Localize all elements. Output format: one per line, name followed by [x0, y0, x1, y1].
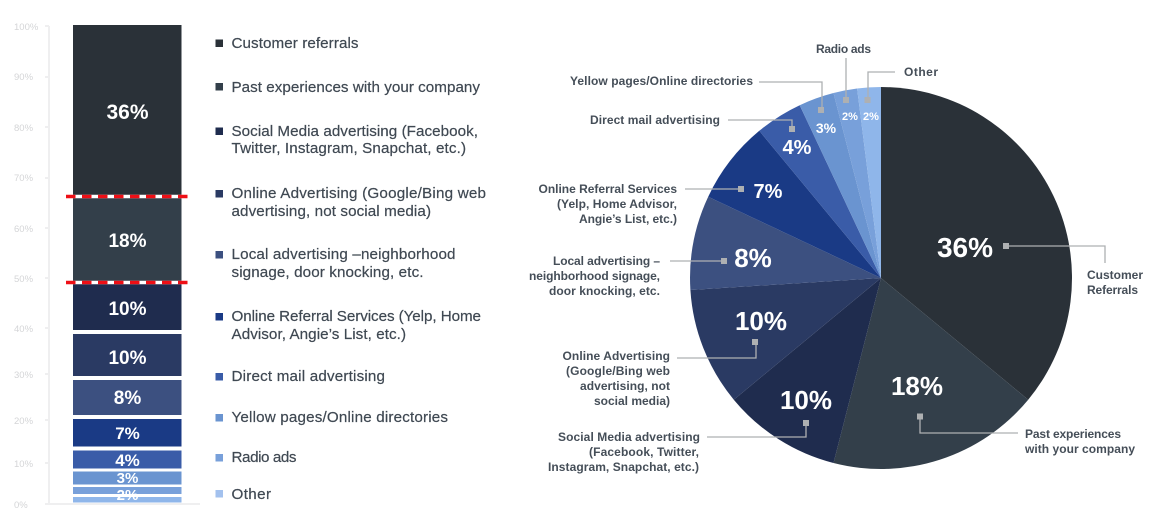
- stacked bar chart: 8%: [114, 388, 141, 409]
- callout: online advertising: advertising, not: [580, 379, 670, 393]
- stacked bar chart: 18%: [108, 231, 147, 252]
- axis: percentage scale: 90%: [14, 72, 34, 83]
- stacked bar chart: 10%: [108, 348, 147, 369]
- pie chart: 18%: [891, 371, 943, 401]
- stacked bar chart: 36%: [106, 101, 149, 124]
- axis: percentage scale: 10%: [14, 459, 34, 470]
- axis: percentage scale: 50%: [14, 274, 34, 285]
- callout: online referral services: (Yelp, Home Advisor,: [557, 197, 677, 211]
- axis: percentage scale: 30%: [14, 370, 34, 381]
- callout: local advertising: door knocking, etc.: [549, 284, 660, 298]
- callout: yellow pages: Yellow pages/Online directories: [570, 74, 753, 88]
- callout: direct mail advertising: Direct mail advertising: [590, 113, 720, 127]
- legend: Local advertising –neighborhood: [232, 246, 456, 263]
- callout: social media advertising: Instagram, Snapchat, etc.): [548, 460, 699, 474]
- legend: [216, 35, 486, 503]
- callout: radio ads: [816, 42, 871, 103]
- legend: Online Advertising (Google/Bing web: [232, 185, 486, 202]
- pie chart: 2%: [842, 111, 858, 123]
- callout: customer referrals: Referrals: [1087, 283, 1138, 297]
- legend: Customer referrals: [232, 35, 359, 52]
- legend: Direct mail advertising: [232, 368, 385, 385]
- legend: Yellow pages/Online directories: [232, 409, 448, 426]
- callout: online referral services: Angie’s List, etc.): [579, 212, 677, 226]
- stacked bar chart: 10%: [108, 299, 147, 320]
- callout: local advertising: neighborhood signage,: [529, 269, 660, 283]
- pie chart: 2%: [863, 111, 879, 123]
- callout: past experiences: with your company: [1024, 442, 1135, 456]
- callout: online advertising: social media): [594, 394, 670, 408]
- axis: percentage scale: [14, 22, 200, 511]
- legend: Online Referral Services (Yelp, Home: [232, 308, 481, 325]
- pie chart: 36%: [937, 232, 993, 263]
- axis: percentage scale: 60%: [14, 224, 34, 235]
- stacked bar chart: 2%: [117, 487, 138, 504]
- stacked bar chart: 7%: [115, 424, 140, 443]
- callout: customer referrals: [1003, 243, 1143, 297]
- legend: advertising, not social media): [232, 203, 431, 220]
- callout: past experiences: [917, 414, 1135, 456]
- stacked bar chart: [73, 25, 182, 504]
- red dashed marker lines: [66, 196, 189, 282]
- callout: social media advertising: Social Media advertising: [558, 430, 700, 444]
- axis: percentage scale: 20%: [14, 416, 34, 427]
- stacked bar chart: 4%: [115, 451, 140, 470]
- axis: percentage scale: 80%: [14, 123, 34, 134]
- callout: other: [864, 65, 938, 103]
- pie chart: 7%: [754, 181, 783, 203]
- callout: other: Other: [904, 65, 938, 79]
- axis: percentage scale: 40%: [14, 324, 34, 335]
- callout: direct mail advertising: [590, 113, 795, 132]
- legend: Social Media advertising (Facebook,: [232, 123, 478, 140]
- callout: yellow pages: [570, 74, 824, 113]
- legend: Radio ads: [232, 449, 297, 466]
- pie chart: 10%: [735, 306, 787, 336]
- pie chart: [690, 87, 1072, 469]
- callout: online advertising: Online Advertising: [562, 349, 670, 363]
- callout: online advertising: (Google/Bing web: [566, 364, 670, 378]
- callout: online referral services: Online Referral Services: [538, 182, 677, 196]
- pie chart: 8%: [734, 243, 772, 273]
- callout: online referral services: [538, 182, 744, 226]
- callout: past experiences: Past experiences: [1025, 427, 1121, 441]
- pie chart: 4%: [783, 137, 812, 159]
- callout: customer referrals: Customer: [1087, 268, 1143, 282]
- axis: percentage scale: 70%: [14, 173, 34, 184]
- legend: Advisor, Angie’s List, etc.): [232, 326, 406, 343]
- legend: Other: [232, 486, 271, 503]
- callout: radio ads: Radio ads: [816, 42, 871, 56]
- callout: local advertising: Local advertising –: [553, 254, 660, 268]
- stacked bar chart: 3%: [117, 470, 138, 487]
- legend: signage, door knocking, etc.: [232, 264, 424, 281]
- axis: percentage scale: 100%: [14, 22, 39, 33]
- legend: Past experiences with your company: [232, 79, 480, 96]
- callout: local advertising: [529, 254, 727, 298]
- callout: social media advertising: (Facebook, Twitter,: [589, 445, 699, 459]
- legend: Twitter, Instagram, Snapchat, etc.): [232, 140, 466, 157]
- pie chart: 3%: [816, 120, 837, 136]
- axis: percentage scale: 0%: [14, 500, 28, 511]
- callout: online advertising: [562, 339, 758, 408]
- callout: social media advertising: [548, 420, 809, 474]
- pie chart: 10%: [780, 385, 832, 415]
